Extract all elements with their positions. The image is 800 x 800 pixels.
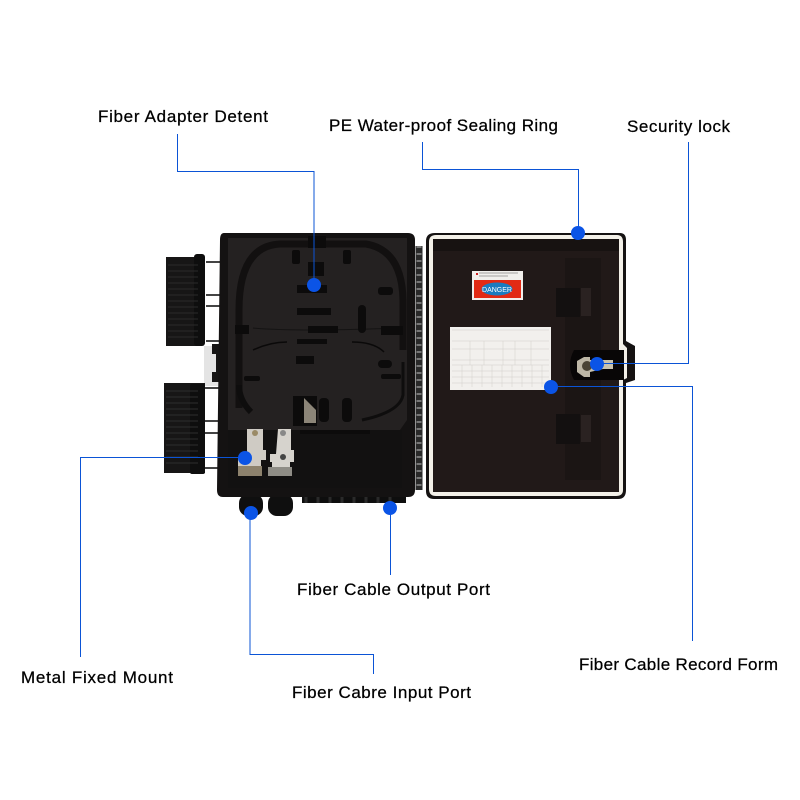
- callout: PE Water-proof Sealing Ring: PE Water-proof Sealing Ring: [329, 116, 558, 135]
- output ports: [302, 492, 406, 503]
- box base: [217, 233, 415, 497]
- callout: Metal Fixed Mount: Metal Fixed Mount: [21, 668, 173, 687]
- hinge latch: [212, 344, 226, 382]
- callout: Security lock: Security lock: [627, 117, 730, 136]
- door interior: [433, 239, 619, 492]
- callout: PE Water-proof Sealing Ring: [329, 116, 585, 240]
- callout: Fiber Cable Record Form: [544, 380, 778, 674]
- metal fixed clamps: [238, 429, 294, 476]
- mounting bracket: upper left: [166, 254, 222, 346]
- door latches: [556, 288, 580, 444]
- cable glands: [239, 494, 293, 516]
- mounting bracket: lower left: [164, 383, 222, 474]
- callout: Fiber Cable Record Form: Fiber Cable Record Form: [579, 655, 778, 674]
- danger label: [472, 271, 523, 300]
- callout: Fiber Adapter Detent: [98, 107, 321, 292]
- callout: Fiber Cable Output Port: Fiber Cable Output Port: [297, 580, 490, 599]
- adapter detents: [235, 236, 403, 434]
- record form: [450, 327, 551, 390]
- lock recess: [570, 350, 624, 380]
- fiber tray: [239, 244, 403, 420]
- callout: Metal Fixed Mount: [21, 451, 252, 687]
- photo: open fiber distribution box: [164, 233, 635, 516]
- callout: Fiber Adapter Detent: Fiber Adapter Detent: [98, 107, 268, 126]
- callout: Security lock: [590, 117, 730, 371]
- sealing ring: [429, 235, 627, 496]
- security lock: [577, 357, 613, 377]
- callout: Fiber Cabre Input Port: Fiber Cabre Input Port: [292, 683, 471, 702]
- callout: Fiber Cabre Input Port: [244, 506, 471, 702]
- callout: Fiber Cable Output Port: [297, 501, 490, 599]
- hinge coil: [416, 246, 422, 490]
- box door: outer frame: [426, 233, 635, 499]
- shadow behind hinge area: [204, 346, 218, 386]
- danger label: DANGER: [482, 287, 512, 294]
